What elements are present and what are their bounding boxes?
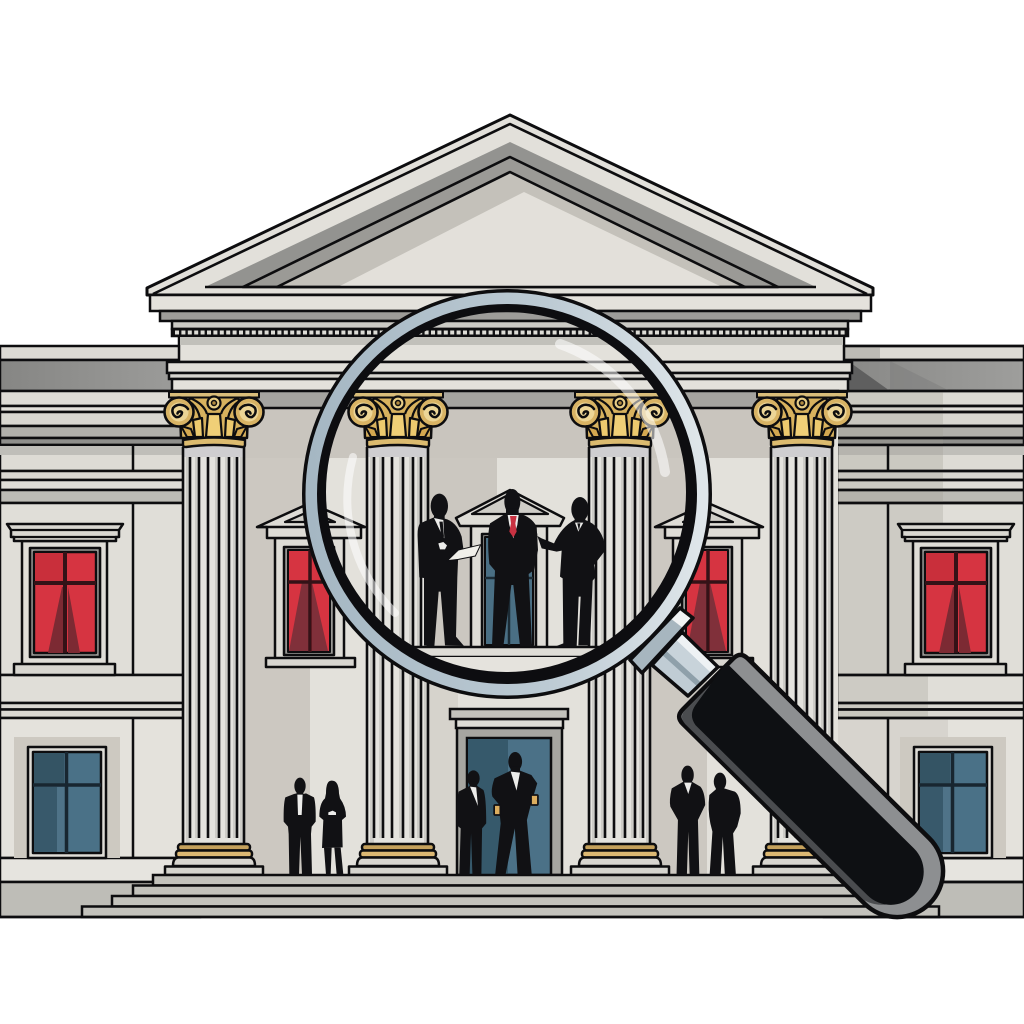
central pediment window behind figures <box>456 490 564 648</box>
central man with red tie <box>488 489 538 647</box>
lower window, right <box>900 737 1006 858</box>
entrance door <box>450 709 568 875</box>
glass highlights <box>347 344 665 613</box>
middle window, left <box>257 503 365 667</box>
magnifying glass <box>304 291 962 936</box>
man on steps <box>284 778 316 875</box>
columns <box>164 392 852 875</box>
lens balcony floor <box>414 646 600 666</box>
handle <box>674 650 962 936</box>
lens ring <box>304 291 710 697</box>
man right of door <box>670 766 705 875</box>
central wall behind portico <box>184 408 838 875</box>
metal collar <box>630 608 693 673</box>
figures: two men at door and two men right <box>456 752 741 875</box>
illustration: magnifying glass over neoclassical building <box>0 114 1024 920</box>
woman on steps <box>319 781 346 875</box>
man at door left <box>456 770 486 875</box>
figures: man and woman on steps, left <box>284 778 346 875</box>
upper window, outer left <box>7 524 123 675</box>
left wing of building <box>0 346 200 917</box>
steps <box>0 875 1024 917</box>
upper window, outer right <box>898 524 1014 675</box>
middle window, right <box>655 503 763 667</box>
man holding document <box>418 494 481 647</box>
entablature <box>150 295 871 408</box>
man far right <box>709 773 741 875</box>
metal neck <box>652 632 718 696</box>
man at door holding gold items <box>492 752 538 875</box>
figures: three suited men inside lens <box>418 489 605 647</box>
man gesturing <box>537 497 605 647</box>
right wing of building <box>824 346 1024 917</box>
pediment <box>147 115 873 295</box>
lower window, left <box>14 737 120 858</box>
